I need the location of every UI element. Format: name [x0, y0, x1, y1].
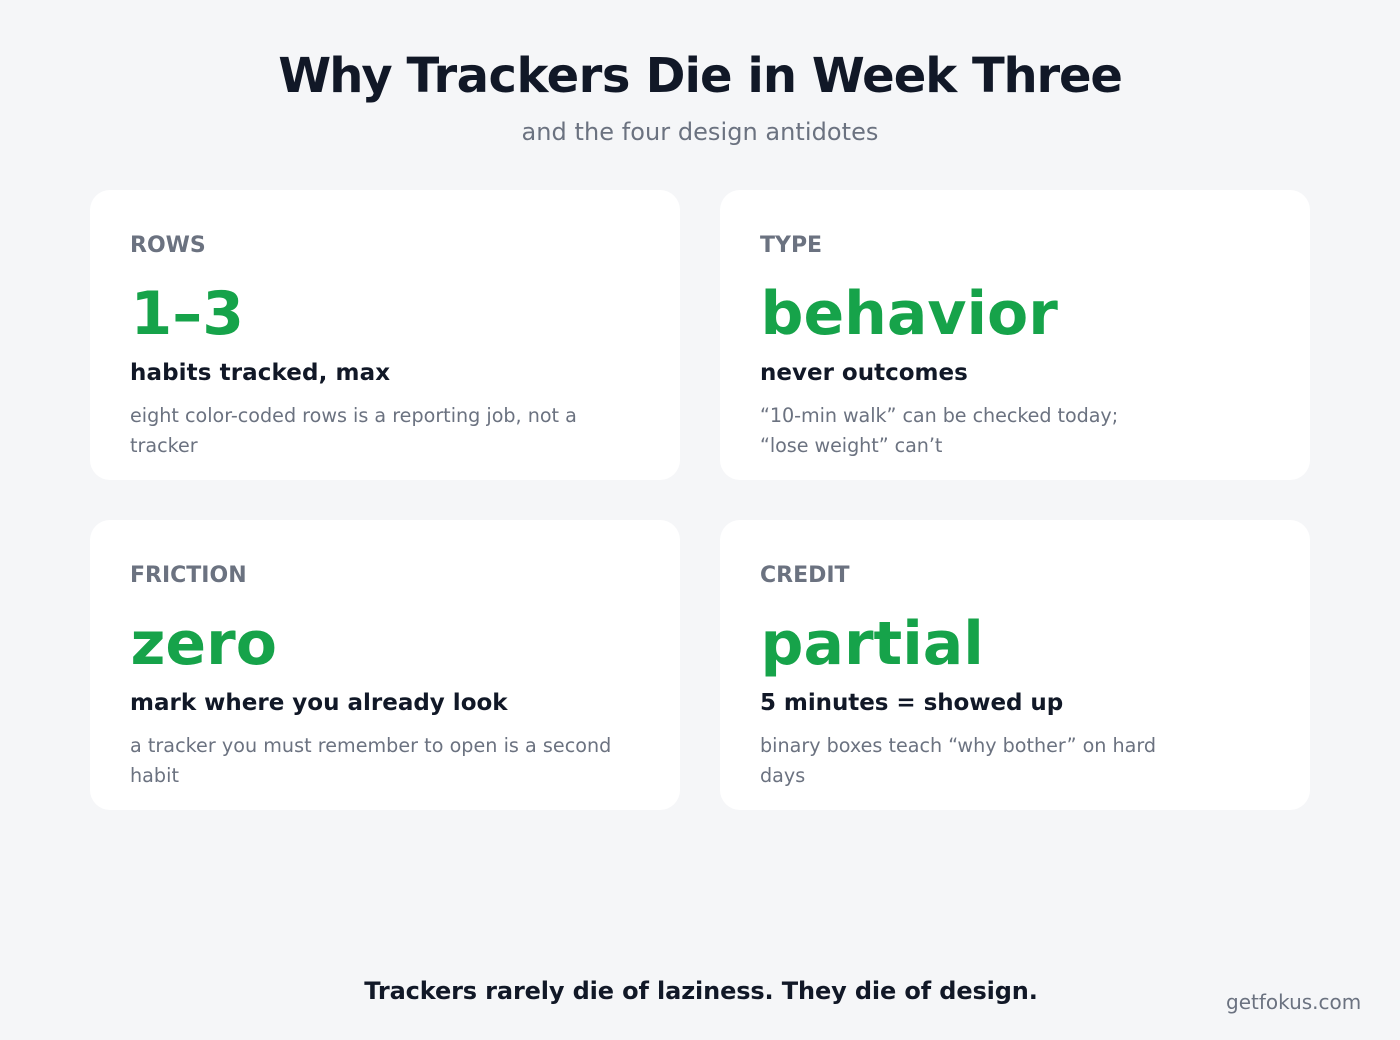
description: type: “10-min walk” can be checked today;: [760, 404, 1118, 427]
panel label: rows: ROWS: [130, 233, 206, 258]
subheading: 5 minutes: 5 minutes = showed up: [760, 690, 1063, 716]
title: Why Trackers Die in Week Three: [278, 48, 1122, 104]
panel: type: [720, 190, 1310, 480]
big value: zero: zero: [130, 609, 277, 679]
panel: friction: [90, 520, 680, 810]
description: type: [760, 404, 1118, 457]
description: credit: binary boxes teach “why bother” on hard: [760, 734, 1156, 757]
panel label: friction: FRICTION: [130, 563, 247, 588]
description: friction: [130, 734, 611, 787]
description: friction: a tracker you must remember to open is a second: [130, 734, 611, 757]
brand: getfokus.com: getfokus.com: [1226, 990, 1361, 1014]
big value: partial: partial: [760, 609, 984, 679]
big value: 1–3: 1–3: [130, 279, 244, 349]
description: rows: eight color-coded rows is a reporting job, not a: [130, 404, 577, 427]
panel: credit: [720, 520, 1310, 810]
closing statement: Trackers rarely die of laziness. They die of design.: [364, 977, 1038, 1005]
big value: behavior: behavior: [760, 279, 1058, 349]
subheading: never outcomes: never outcomes: [760, 360, 968, 386]
description: friction: habit: [130, 764, 179, 787]
subheading: mark where you look: mark where you already look: [130, 690, 508, 716]
description: type: “lose weight” can’t: [760, 434, 942, 457]
panel label: type: TYPE: [760, 233, 822, 258]
panel label: credit: CREDIT: [760, 563, 850, 588]
description: credit: days: [760, 764, 805, 787]
description: rows: [130, 404, 577, 457]
subheading: habits tracked: habits tracked, max: [130, 360, 390, 386]
subtitle: and the four design antidotes: [522, 118, 878, 146]
panel: rows: [90, 190, 680, 480]
description: rows: tracker: [130, 434, 198, 457]
description: credit: [760, 734, 1156, 787]
